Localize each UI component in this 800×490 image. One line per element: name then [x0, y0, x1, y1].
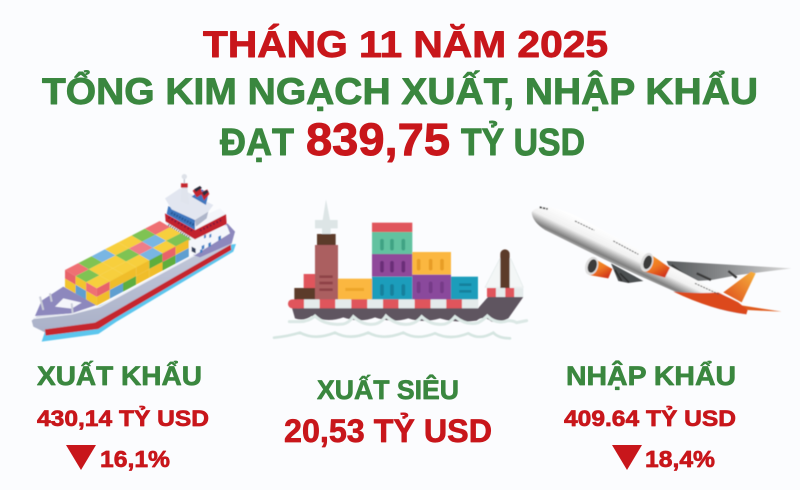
export percent: 16,1%	[100, 446, 170, 472]
icon: cargo ship, flat	[274, 199, 527, 338]
title line 3: ĐẠT	[220, 122, 294, 164]
windows	[575, 221, 719, 294]
mast	[315, 199, 338, 235]
deck rail	[288, 299, 478, 308]
export down arrow	[66, 445, 96, 470]
near wing	[611, 263, 643, 283]
container stack	[65, 221, 191, 306]
hull	[292, 297, 523, 322]
surplus heading: XUẤT SIÊU	[317, 374, 459, 405]
import heading: NHẬP KHẨU	[566, 360, 736, 391]
tail colour	[673, 292, 748, 314]
superstructure	[165, 174, 230, 255]
surplus value: 20,53 TỶ USD	[284, 413, 492, 449]
far wing	[667, 261, 792, 282]
title line 3: 839,75	[306, 114, 450, 165]
tailplane	[735, 304, 782, 312]
bow mast	[485, 258, 523, 287]
import block	[564, 360, 736, 472]
import value: 409.64 TỶ USD	[564, 406, 736, 431]
export value: 430,14 TỶ USD	[37, 406, 209, 431]
icon: airplane	[532, 207, 792, 314]
import down arrow	[612, 445, 642, 470]
engine near	[638, 251, 670, 278]
containers	[338, 223, 478, 300]
trade surplus block	[284, 374, 492, 449]
export block	[37, 360, 209, 472]
title	[42, 23, 758, 165]
title line 2: TỔNG KIM NGẠCH XUẤT, NHẬP KHẨU	[42, 69, 758, 112]
waves	[289, 316, 527, 324]
title line 3: TỶ USD	[461, 120, 585, 164]
title line 1: THÁNG 11 NĂM 2025	[203, 23, 608, 65]
fin	[723, 272, 756, 302]
import percent: 18,4%	[645, 446, 715, 472]
export heading: XUẤT KHẨU	[37, 360, 202, 391]
title line 3	[220, 114, 585, 165]
icon: container ship, isometric	[32, 174, 236, 342]
engine far	[583, 255, 612, 278]
fuselage	[532, 207, 748, 314]
